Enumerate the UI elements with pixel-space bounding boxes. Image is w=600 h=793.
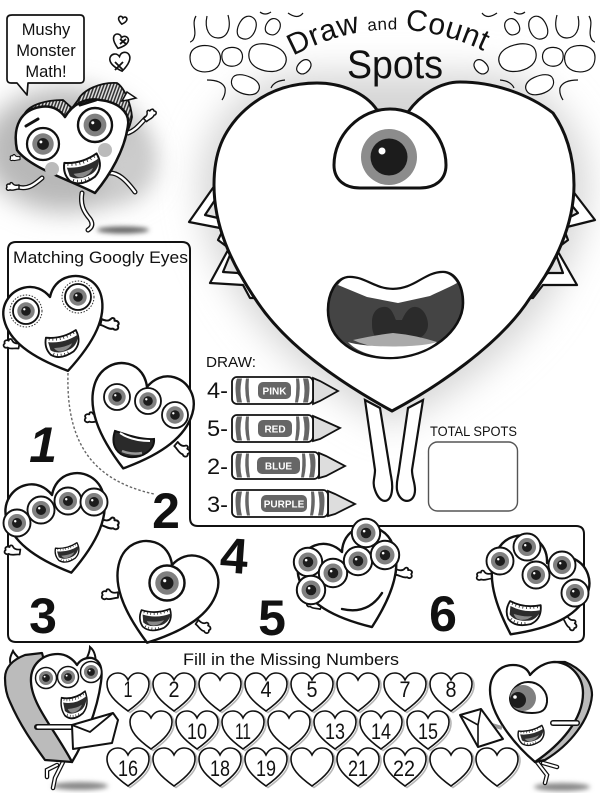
numeral 6: 6 [429,586,457,642]
mouth [61,691,88,719]
back hatching [25,83,132,137]
monster 1: two eyes [0,270,120,383]
mouth [45,330,80,358]
number hearts grid: 18 [210,756,230,781]
front heart [490,662,583,762]
crayon row: 5 red [207,415,340,442]
number hearts grid: 16 [118,756,138,781]
crayon row: 3 purple: PURPLE [264,500,305,510]
left arm stub [492,725,502,728]
numeral 4: 4 [218,527,250,585]
body [0,270,117,383]
mouth [518,725,545,746]
numeral 5: 5 [258,590,286,646]
horns [10,647,96,670]
label: TOTAL SPOTS: TOTAL SPOTS [430,423,517,439]
dark smile mouth [113,431,154,457]
crayon row: 4 pink [207,377,338,404]
monster 4: one eye [98,534,226,658]
speech bubble: Mushy Monster Math [7,15,84,95]
big heart legs [365,400,423,501]
speech bubble: Mushy Monster Math: Mushy [22,21,71,39]
crayon row: 2 blue: BLUE [265,462,292,472]
big heart mouth [328,272,463,358]
speech bubble: Mushy Monster Math: Math! [25,63,67,81]
legs [47,762,63,788]
number hearts grid: 22 [393,756,415,781]
section: DRAW label: DRAW: [206,355,256,371]
number hearts grid: 1 [124,677,132,702]
number hearts grid: 2 [168,677,180,702]
heart body [16,99,128,193]
arms and legs [18,118,146,230]
eyes [27,128,59,160]
number hearts grid: 21 [348,756,368,781]
envelope [460,709,503,747]
number hearts grid: 5 [306,677,318,702]
cheeks [45,162,59,176]
number hearts grid [107,673,520,788]
soft shadow: top-left monster backdrop [0,88,155,212]
number hearts grid: 8 [446,677,456,702]
numeral 2: 2 [152,483,180,539]
crayon row: 2 blue [207,452,345,479]
number hearts grid: 19 [256,756,276,781]
small floating hearts [109,16,132,73]
mouth [63,153,102,185]
number hearts grid: 14 [371,719,391,744]
monster 3: four eyes [0,467,120,585]
number hearts grid: 15 [418,719,438,744]
monster: big one-eyed heart [189,82,595,501]
eye [510,682,547,713]
soft shadow: big heart [200,72,588,425]
big heart body [214,82,574,411]
crayon row: 5 red: RED [264,424,286,436]
speech bubble: Mushy Monster Math: Monster [16,42,76,60]
big heart eye [334,109,446,188]
heading: Matching Googly Eyes: Matching Googly Eyes [13,248,188,267]
arm [553,720,577,726]
big heart arms [189,185,595,298]
eyes with dotted guides [10,295,42,327]
numeral 1: 1 [29,417,57,473]
hands [142,107,157,122]
hands [100,316,120,330]
numeral 3: 3 [29,588,57,644]
monster: bottom-left with envelope [5,647,118,790]
decorative spots left [190,12,314,100]
knob [122,92,136,101]
monster 5: six eyes [290,518,418,646]
number hearts grid: 10 [187,719,207,744]
panel: outline for matching and counting area [8,242,584,642]
number hearts grid: 13 [325,719,345,744]
heading: Fill in the Missing Numbers: Fill in the Missing Numbers [183,650,399,669]
title: Spots: Spots [347,43,443,87]
front heart [31,654,102,762]
number hearts grid: 11 [235,719,251,744]
monster: bottom-right with envelope [460,662,592,791]
box: total spots answer [428,442,518,511]
crayon row: 4 pink: PINK [263,386,287,398]
side of heart [535,662,592,762]
decorative spots right [471,12,595,100]
crayon row: 3 purple: 3- [207,492,228,517]
dotted matching line [68,373,154,494]
brows [26,100,96,126]
legs [537,762,557,783]
crayon row: 3 purple [207,490,355,517]
crayon row: 5 red: 5- [207,416,228,441]
title: Draw and Count: Draw and Count [286,10,490,55]
crayon row: 4 pink: 4- [207,378,228,403]
floor shadow [97,226,149,234]
side of heart [5,653,72,762]
number hearts grid: 4 [260,677,272,702]
monster: running heart [6,83,157,233]
number hearts grid: 7 [400,677,410,702]
monster 2: three eyes [74,356,201,483]
crayon row: 2 blue: 2- [207,454,228,479]
arm [37,724,72,730]
monster 6: five eyes [466,526,599,657]
eyes [36,668,56,688]
envelope [72,713,118,749]
